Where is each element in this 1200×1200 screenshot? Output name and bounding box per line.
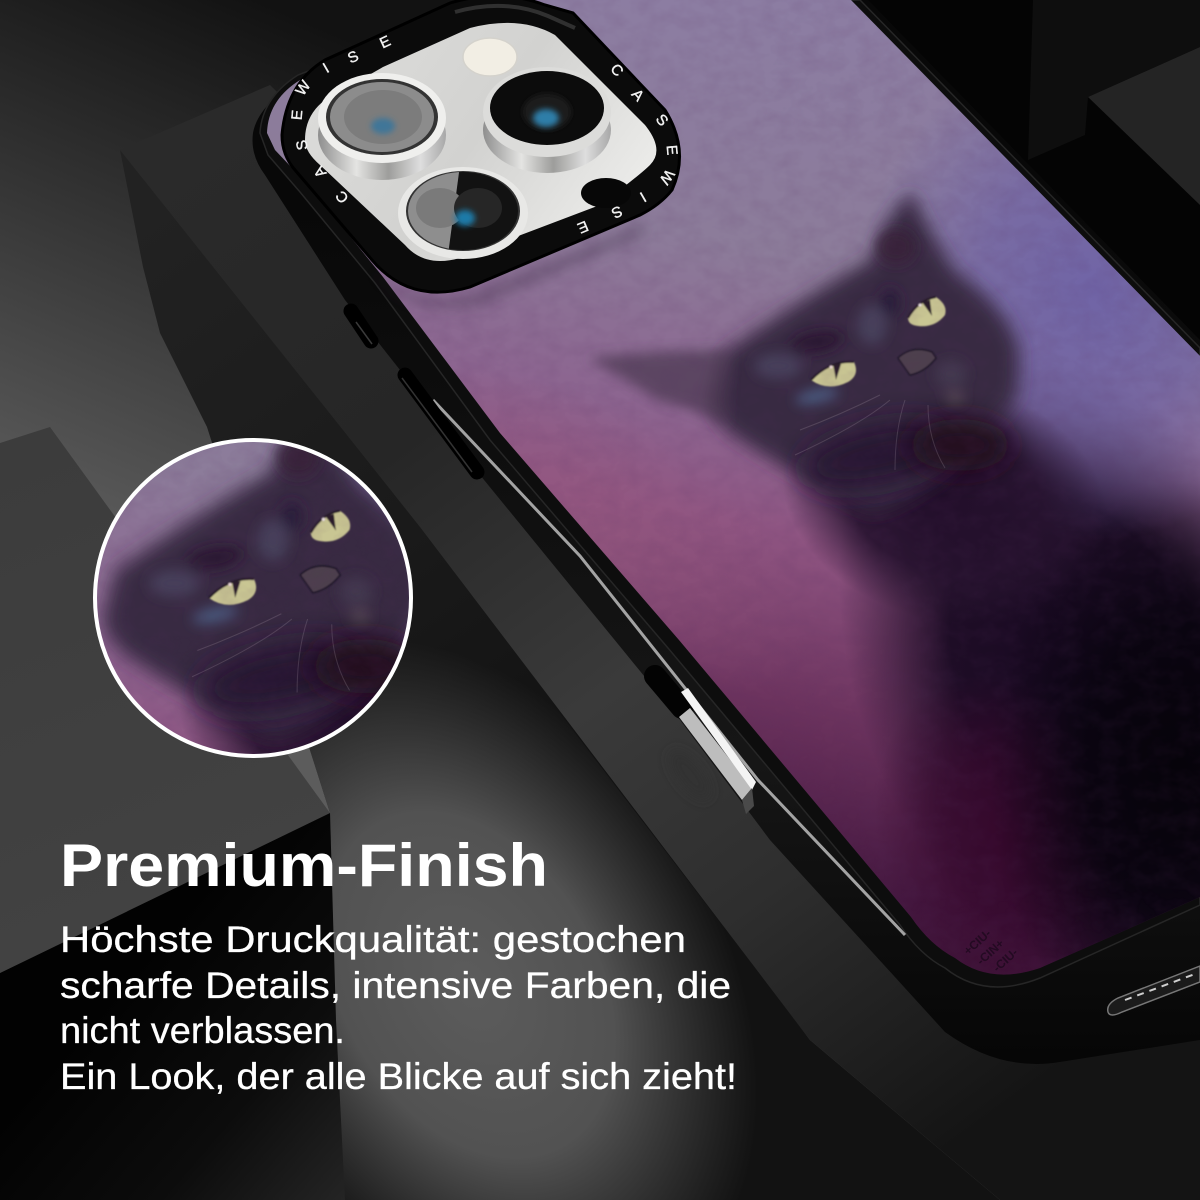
CASEWISE ring lettering: E — [289, 109, 306, 121]
lens top right — [483, 67, 611, 173]
CASEWISE ring lettering: I — [637, 188, 649, 205]
light glow on block side — [207, 427, 1000, 1200]
body text: Höchste Druckqualität: gestochen — [60, 919, 686, 960]
paint base — [267, 0, 1200, 975]
body text: scharfe Details, intensive Farben, die — [60, 965, 731, 1006]
paint texture — [624, 15, 1196, 876]
CASEWISE ring lettering: A — [311, 163, 330, 181]
CASEWISE ring lettering: W — [655, 166, 678, 188]
volume button slot — [402, 375, 477, 472]
detail circle: cat zoom — [93, 438, 413, 758]
cat neck — [755, 341, 1135, 659]
CASEWISE ring lettering: I — [320, 60, 332, 77]
soft reflection near switch — [662, 744, 718, 806]
cat whiskers — [795, 395, 945, 470]
cat face shading — [754, 229, 967, 407]
artist signature: +CIU- — [961, 926, 994, 958]
body text — [60, 919, 737, 1097]
CASEWISE ring lettering: E — [377, 33, 393, 52]
soft pink wash — [503, 436, 682, 640]
case outer body — [252, 0, 1200, 1064]
cat chest darkness — [796, 409, 964, 501]
CASEWISE ring lettering: C — [332, 187, 352, 206]
lens top left — [318, 73, 446, 180]
CASEWISE ring lettering: W — [292, 77, 315, 99]
cat nose — [898, 350, 936, 375]
CASEWISE ring lettering: S — [652, 111, 671, 130]
CASEWISE ring lettering: E — [575, 217, 591, 236]
left block front face — [0, 813, 345, 1200]
CASEWISE ring lettering: S — [609, 202, 625, 221]
power button slot — [655, 676, 682, 708]
lens bottom — [398, 165, 530, 259]
CASEWISE ring lettering: S — [345, 48, 361, 67]
top ring sheen — [455, 6, 575, 28]
CASEWISE ring lettering — [289, 33, 680, 236]
top right black area — [851, 0, 1200, 400]
top right column — [1028, 0, 1200, 160]
body text: Ein Look, der alle Blicke auf sich zieht! — [60, 1056, 737, 1097]
island ring — [282, 0, 680, 292]
cat body lower dark paint — [848, 385, 1200, 966]
glass plate — [305, 23, 656, 261]
flash — [463, 38, 517, 76]
glossy edge highlight — [433, 400, 905, 935]
central block side face — [120, 150, 1000, 1200]
artist signature — [966, 932, 1016, 970]
CASEWISE ring lettering: S — [293, 139, 312, 151]
cat eyes — [811, 297, 946, 387]
cat artwork — [710, 40, 1200, 659]
artist signature: -CIN+ — [974, 936, 1007, 968]
metal side switch — [679, 688, 756, 814]
CASEWISE ring lettering: A — [628, 86, 647, 105]
body text: nicht verblassen. — [60, 1010, 345, 1051]
charging port — [1108, 966, 1200, 1015]
case front rim — [260, 0, 1200, 987]
CASEWISE ring lettering: E — [663, 144, 680, 156]
left block top face — [0, 427, 330, 973]
camera island — [282, 0, 680, 309]
island shadow — [372, 225, 650, 309]
side button slot upper — [351, 311, 372, 344]
cat left ear — [588, 350, 730, 425]
phone case — [252, 0, 1200, 1064]
title: Premium-Finish — [60, 832, 548, 899]
microphone hole — [581, 178, 631, 208]
artist signature: -CIU- — [990, 945, 1021, 975]
magnified artwork — [97, 442, 409, 754]
cat head mass — [710, 192, 1019, 512]
CASEWISE ring lettering: C — [607, 61, 627, 80]
top right block top face — [1088, 47, 1200, 205]
white circle border — [95, 440, 411, 756]
painted back with cat — [267, 0, 1200, 975]
